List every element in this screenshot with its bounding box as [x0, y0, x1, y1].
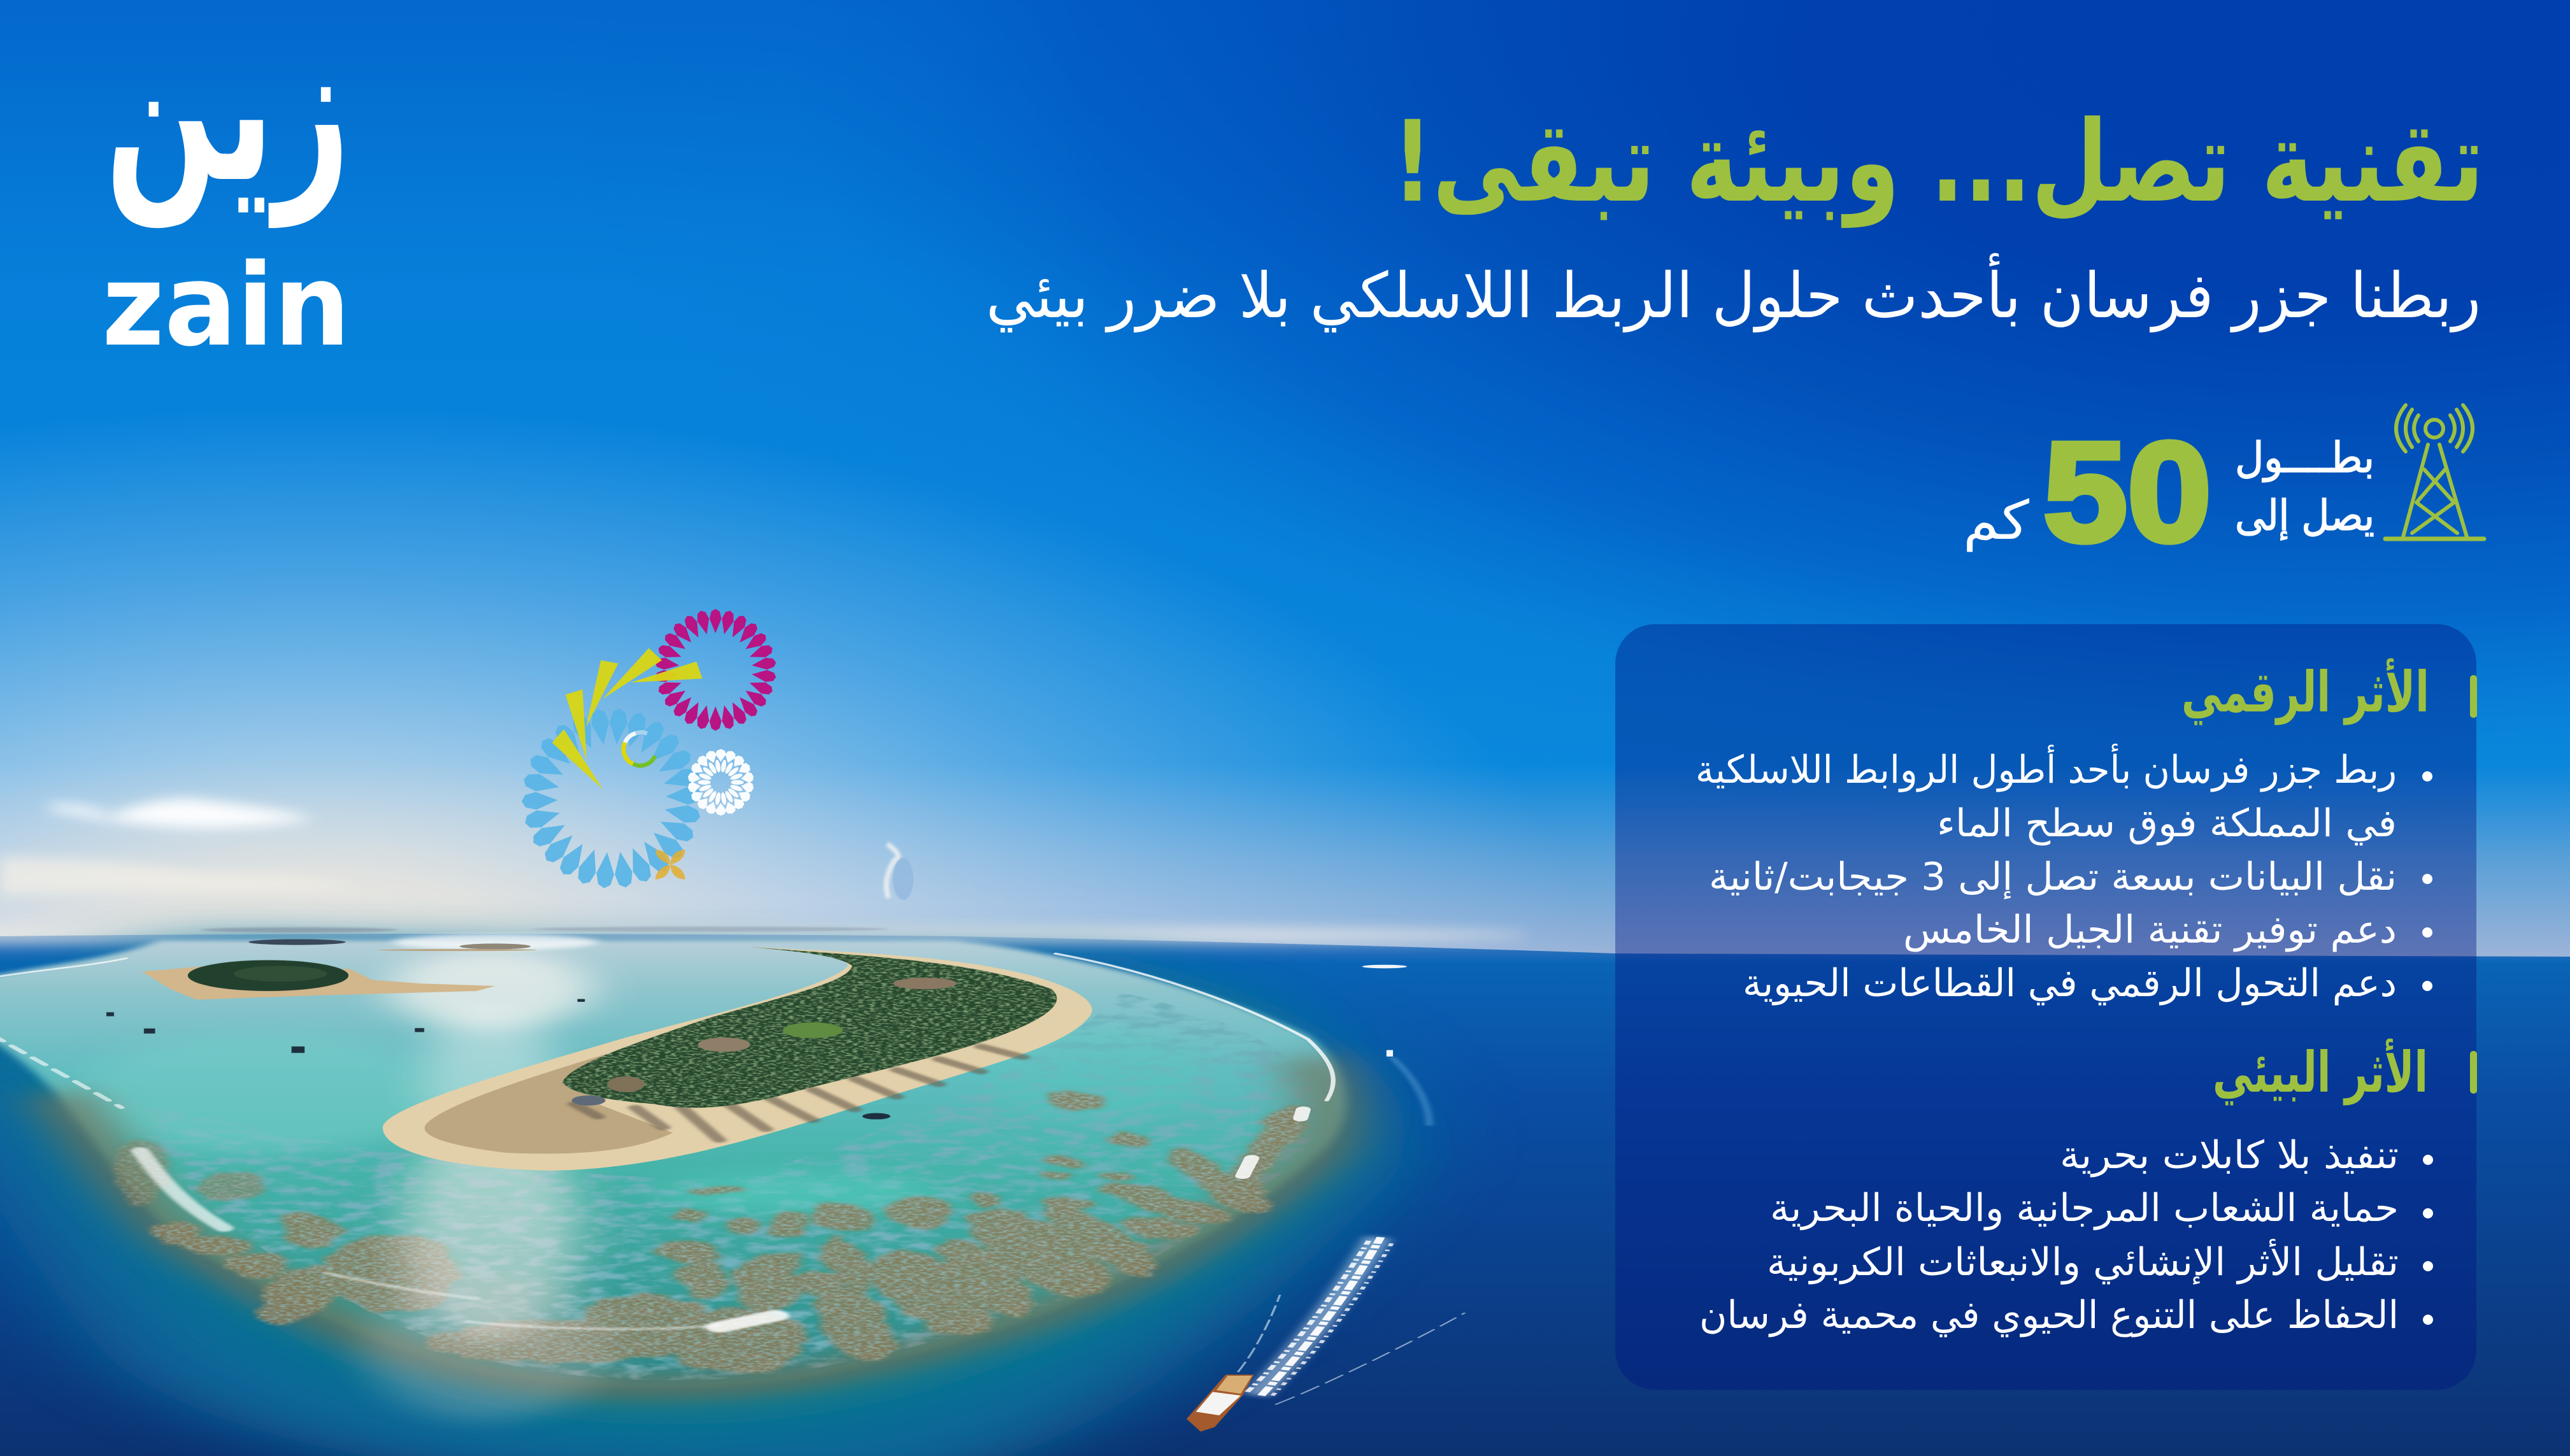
sun glint on water	[364, 934, 607, 1421]
bullet list: دعم التحول الرقمي في القطاعات الحيوية	[1743, 961, 2397, 1006]
stat label: reaches: يصل إلى	[2235, 491, 2374, 541]
logo Latin wordmark: zain	[102, 239, 350, 371]
rosette: white ring	[687, 749, 755, 816]
palm shadows on beach	[575, 1046, 1023, 1140]
rosette: orange clover	[655, 850, 685, 880]
logo: zain	[102, 0, 350, 371]
subtitle: ربطنا جزر فرسان بأحدث حلول الربط اللاسلكي بلا ضرر بيئي	[986, 253, 2481, 332]
bullet list: حماية الشعاب المرجانية والحياة البحرية	[1770, 1186, 2399, 1231]
reef mottling	[112, 992, 1318, 1380]
lagoon	[0, 940, 1345, 1388]
bullet list: في المملكة فوق سطح الماء	[1937, 801, 2397, 846]
ship wake	[1238, 1057, 1465, 1404]
small island	[142, 960, 495, 1000]
small boat and distant streak	[1362, 965, 1407, 1057]
coral reef patches	[116, 1087, 1317, 1374]
passenger ship	[1187, 1374, 1253, 1432]
bullet list	[1695, 743, 2432, 1006]
tree canopy highlights	[572, 978, 957, 1106]
stat number: 50	[2043, 413, 2211, 571]
section: environmental impact	[1699, 1038, 2477, 1338]
bullet list: الحفاظ على التنوع الحيوي في محمية فرسان	[1699, 1293, 2399, 1338]
emblem: Islamic geometric rosette	[522, 609, 776, 888]
bullet list	[1699, 1133, 2433, 1338]
surf lines	[0, 953, 1333, 1329]
bullet list: دعم توفير تقنية الجيل الخامس	[1903, 908, 2397, 952]
horizon mist	[0, 925, 1529, 945]
far islets	[201, 927, 887, 951]
panel: impact overlay	[1615, 624, 2476, 1390]
bullet list: تنفيذ بلا كابلات بحرية	[2060, 1133, 2399, 1178]
bright water near island	[972, 1025, 1215, 1118]
reef rim	[56, 1057, 1331, 1388]
clouds	[0, 799, 913, 900]
bullet list: ربط جزر فرسان بأحد أطول الروابط اللاسلكية	[1695, 743, 2397, 792]
section: digital impact	[1695, 658, 2477, 1006]
section heading: الأثر البيئي	[2213, 1038, 2428, 1106]
bullet list: تقليل الأثر الإنشائي والانبعاثات الكربونية	[1767, 1239, 2399, 1285]
section heading: الأثر الرقمي	[2181, 658, 2429, 725]
inner beach shading	[425, 1053, 673, 1153]
rosette: large blue ring	[514, 701, 710, 896]
section marker	[2470, 1051, 2477, 1094]
icon: signal tower	[2385, 405, 2484, 539]
main island sand	[383, 946, 1092, 1171]
island and reef aerial scene	[0, 904, 1466, 1456]
stat label: length: بطــــول	[2235, 433, 2374, 482]
rosette: yellow rays	[552, 648, 703, 789]
palm forest	[562, 946, 1057, 1108]
bullet list: نقل البيانات بسعة تصل إلى 3 جيجابت/ثانية	[1709, 855, 2397, 899]
background: sky	[0, 0, 2570, 962]
background: ocean	[0, 934, 2570, 1456]
inner teal halo around reef	[56, 964, 1345, 1425]
section marker	[2470, 675, 2477, 718]
rosette: magenta ring	[654, 609, 776, 731]
outer teal halo around reef	[0, 938, 1404, 1456]
stat unit: كم	[1963, 489, 2029, 552]
boats on the lagoon	[106, 999, 890, 1120]
rosette: small segmented arc	[624, 732, 655, 766]
stat: 50 km range	[1963, 413, 2374, 571]
